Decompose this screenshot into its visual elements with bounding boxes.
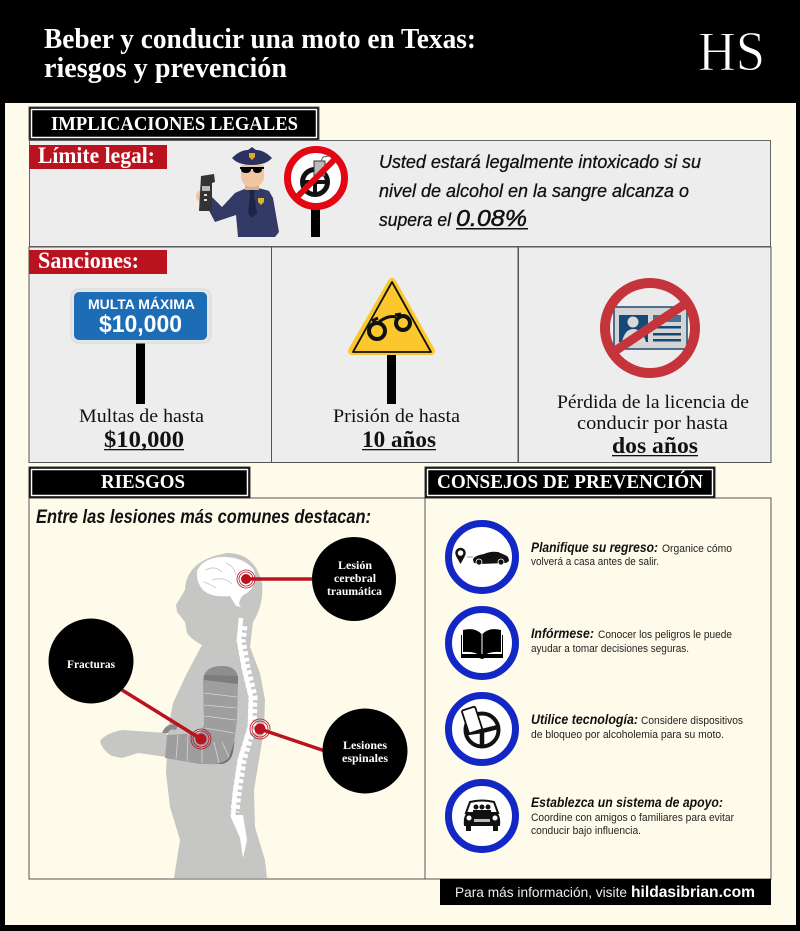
icon: no drinking and driving sign xyxy=(288,150,344,237)
icon: multa sign: $10,000 xyxy=(99,311,182,338)
icon: handcuffs warning sign xyxy=(352,282,431,404)
heading: implicaciones legales: IMPLICACIONES LEGALES xyxy=(51,113,298,135)
text: pérdida de licencia: dos años xyxy=(612,433,698,458)
callout: lesión cerebral: Lesión xyxy=(338,558,372,572)
label: límite legal: Límite legal: xyxy=(38,143,155,168)
icon: pin and car xyxy=(448,524,516,590)
callout: lesión cerebral: cerebral xyxy=(334,571,377,585)
footer: website link: hildasibrian.com xyxy=(631,884,755,901)
callout: lesiones espinales: Lesiones xyxy=(343,738,387,752)
text: pérdida de licencia xyxy=(557,393,749,458)
text: prisión: 10 años xyxy=(362,427,436,452)
tip: sistema de apoyo: conducir bajo influencia. xyxy=(531,825,641,837)
heading: implicaciones legales xyxy=(29,107,319,140)
tip: utilice tecnología: Considere dispositivos xyxy=(641,715,743,727)
callout: fracturas: Fracturas xyxy=(67,657,115,671)
title: riesgos y prevención xyxy=(44,53,287,84)
tip: utilice tecnología: Utilice tecnología: xyxy=(531,711,638,727)
icon: phone and steering wheel xyxy=(448,696,516,762)
panel: riesgos xyxy=(29,498,425,879)
text: legal limit: supera el xyxy=(379,209,452,230)
tip: utilice tecnología xyxy=(448,696,743,762)
title: Beber y conducir una moto en Texas: xyxy=(44,24,476,55)
tip: planifique: volverá a casa antes de salir. xyxy=(531,556,659,568)
callout: lesiones espinales xyxy=(250,708,408,794)
heading: consejos de prevención: CONSEJOS DE PREVENCIÓN xyxy=(437,469,704,493)
heading: riesgos xyxy=(29,467,250,498)
tip: planifique: Organice cómo xyxy=(662,543,732,555)
brain xyxy=(197,557,255,607)
text: pérdida de licencia: Pérdida de la licencia de xyxy=(557,393,749,413)
icon: open book xyxy=(448,610,516,676)
panel: límite legal xyxy=(29,140,770,246)
text: pérdida de licencia: conducir por hasta xyxy=(577,414,728,434)
icon: police officer with breathalyzer xyxy=(196,147,279,237)
text: legal limit: Usted estará legalmente intoxicado si su xyxy=(379,151,701,172)
tip: utilice tecnología: de bloqueo por alcoholemia para su moto. xyxy=(531,729,724,741)
icon: no license xyxy=(605,283,695,373)
icon: car with passengers xyxy=(448,782,516,850)
tip: infórmese: Conocer los peligros le puede xyxy=(598,629,732,641)
callout: lesión cerebral xyxy=(237,537,396,621)
tip: planifique xyxy=(448,524,732,590)
callout: lesión cerebral: traumática xyxy=(327,584,382,598)
footer: website link xyxy=(440,879,771,905)
callout: lesiones espinales: espinales xyxy=(342,751,388,765)
tip: sistema de apoyo xyxy=(448,782,734,850)
tip: infórmese: Infórmese: xyxy=(531,625,594,641)
heading: riesgos: RIESGOS xyxy=(101,471,185,493)
text: multas: Multas de hasta xyxy=(79,407,204,427)
logo: HS: HS xyxy=(698,21,765,83)
tip: infórmese xyxy=(448,610,732,676)
icon: multa sign: MULTA MÁXIMA xyxy=(88,296,195,312)
subheading: lesiones: Entre las lesiones más comunes destacan: xyxy=(36,507,371,528)
text: legal limit xyxy=(379,151,701,231)
tip: sistema de apoyo: Establezca un sistema de apoyo: xyxy=(531,794,723,810)
label: sanciones: Sanciones: xyxy=(38,248,139,273)
heading: consejos de prevención xyxy=(425,467,715,498)
panel: sanciones xyxy=(29,247,771,462)
text: legal limit: 0.08% xyxy=(456,205,527,231)
tip: infórmese: ayudar a tomar decisiones seguras. xyxy=(531,643,689,655)
figure: human silhouette xyxy=(100,553,267,878)
panel: consejos de prevención xyxy=(425,498,771,879)
text: multas xyxy=(79,407,204,452)
text: multas: $10,000 xyxy=(104,427,184,452)
text: prisión xyxy=(333,407,460,452)
text: prisión: Prisión de hasta xyxy=(333,407,460,427)
footer: website link: Para más información, visite xyxy=(455,884,627,900)
tip: planifique: Planifique su regreso: xyxy=(531,539,658,555)
bandage: arm xyxy=(165,666,238,764)
icon: multa sign xyxy=(71,289,211,404)
callout: fracturas xyxy=(48,618,211,749)
spine xyxy=(230,618,253,858)
text: legal limit: nivel de alcohol en la sangre alcanza o xyxy=(379,180,689,201)
tip: sistema de apoyo: Coordine con amigos o familiares para evitar xyxy=(531,812,734,824)
title xyxy=(44,24,476,84)
